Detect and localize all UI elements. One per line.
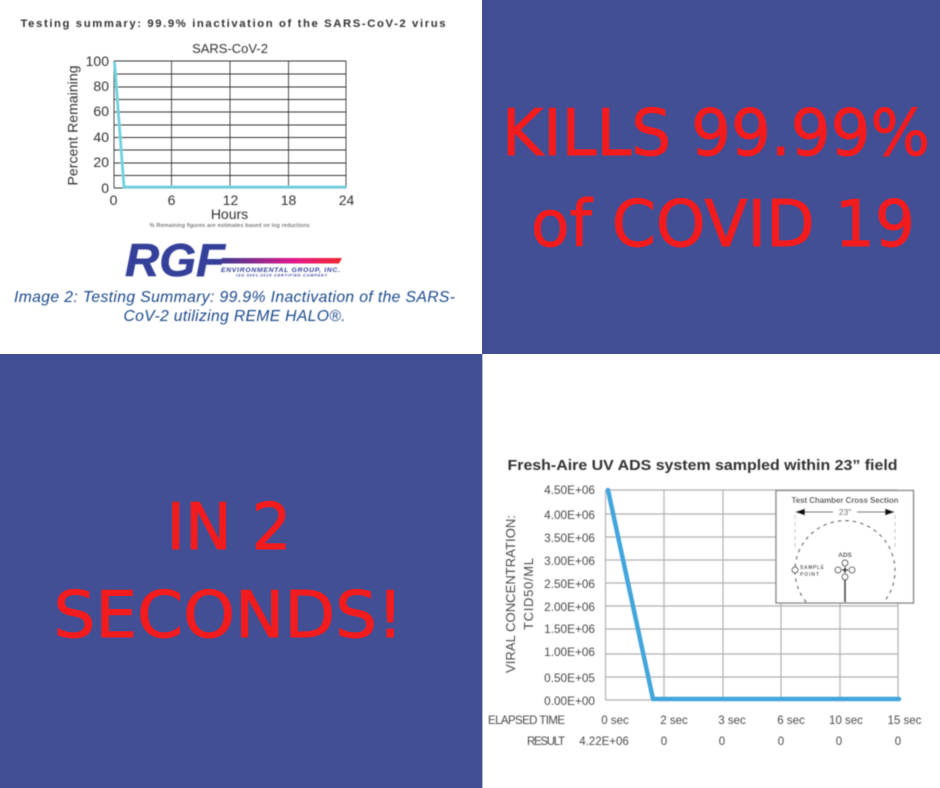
table: elapsed time and result: 0 — [836, 736, 842, 748]
logo: RGF Environmental Group — [125, 234, 342, 286]
line chart: percent remaining: 12 — [223, 192, 238, 208]
inset: test chamber cross section — [776, 490, 914, 603]
line chart: viral concentration: 0.00E+00 — [544, 694, 595, 708]
logo: RGF Environmental Group: ISO 9001:2015 CERTIFIED COMPANY — [236, 274, 327, 278]
line chart: percent remaining: 20 — [93, 154, 109, 170]
table: elapsed time and result: 10 sec — [829, 715, 863, 727]
inset: test chamber cross section: Test Chamber Cross Section — [792, 496, 899, 505]
line chart: viral concentration: VIRAL CONCENTRATION: — [503, 515, 518, 673]
line chart: viral concentration: 2.50E+06 — [544, 577, 595, 591]
line chart: percent remaining: 80 — [93, 78, 109, 94]
logo: RGF Environmental Group: RGF — [125, 234, 227, 286]
table: elapsed time and result — [488, 715, 922, 748]
line chart: percent remaining: 0 — [101, 180, 109, 196]
panel: SARS-CoV-2 testing summary — [14, 18, 455, 325]
table: elapsed time and result: 3 sec — [718, 715, 746, 727]
table: elapsed time and result: 0 — [895, 736, 901, 748]
inset: test chamber cross section: SAMPLE — [800, 565, 825, 571]
line chart: percent remaining: 18 — [281, 192, 296, 208]
table: elapsed time and result: 0 — [778, 736, 784, 748]
panel: blue bottom left — [0, 354, 482, 788]
heading: testing summary: Testing summary: 99.9% inactivation of the SARS-CoV-2 virus — [20, 18, 446, 30]
table: elapsed time and result: RESULT — [527, 736, 565, 748]
line chart: viral concentration: 3.00E+06 — [544, 554, 595, 568]
chart heading: Fresh-Aire UV ADS system sampled within 23” field — [508, 458, 898, 474]
line chart: viral concentration: 1.50E+06 — [544, 622, 595, 636]
table: elapsed time and result: 0 — [661, 736, 667, 748]
headline: kills 99.99% of COVID 19: KILLS 99.99% — [502, 97, 930, 171]
inset: test chamber cross section: 23" — [839, 507, 851, 517]
line chart: percent remaining: % Remaining figures are estimates based on log reductions — [150, 223, 310, 229]
line chart: viral concentration — [503, 483, 899, 708]
line chart: percent remaining: 24 — [339, 192, 354, 208]
line chart: percent remaining: 100 — [86, 53, 109, 69]
table: elapsed time and result: 6 sec — [777, 715, 805, 727]
inset: test chamber cross section: POINT — [800, 572, 819, 578]
line chart: viral concentration: 1.00E+06 — [544, 645, 595, 659]
line chart: viral concentration: TCID50/ML — [521, 558, 536, 630]
table: elapsed time and result: 2 sec — [660, 715, 688, 727]
line chart: percent remaining: Hours — [211, 206, 248, 222]
inset: test chamber cross section: ADS — [838, 552, 853, 559]
line chart: viral concentration: 4.00E+06 — [544, 508, 595, 522]
table: elapsed time and result: ELAPSED TIME — [488, 715, 565, 727]
headline: kills 99.99% of COVID 19: of COVID 19 — [531, 188, 915, 262]
chart title: SARS-CoV-2 — [192, 41, 268, 56]
line chart: percent remaining — [64, 53, 354, 229]
caption: CoV-2 utilizing REME HALO®. — [124, 308, 346, 325]
headline: in 2 seconds — [54, 491, 404, 653]
line chart: viral concentration: 2.00E+06 — [544, 600, 595, 614]
line chart: percent remaining: 6 — [168, 192, 176, 208]
headline: in 2 seconds: IN 2 — [166, 491, 292, 565]
headline: kills 99.99% of COVID 19 — [502, 97, 930, 262]
logo: RGF Environmental Group: ENVIRONMENTAL GROUP, INC. — [221, 267, 340, 274]
line chart: percent remaining: 40 — [93, 129, 109, 145]
line chart: percent remaining: 60 — [93, 103, 109, 119]
table: elapsed time and result: 0 — [719, 736, 725, 748]
line chart: percent remaining: 0 — [110, 192, 118, 208]
table: elapsed time and result: 4.22E+06 — [579, 736, 629, 748]
panel: blue top right — [482, 0, 940, 354]
panel: Fresh-Aire UV ADS chart — [488, 458, 922, 748]
line chart: viral concentration: 4.50E+06 — [544, 483, 595, 497]
table: elapsed time and result: 0 sec — [601, 715, 629, 727]
caption: Image 2: Testing Summary: 99.9% Inactivation of the SARS- — [14, 289, 455, 306]
headline: in 2 seconds: SECONDS! — [54, 579, 404, 653]
caption — [14, 289, 455, 325]
table: elapsed time and result: 15 sec — [888, 715, 922, 727]
line chart: viral concentration: 0.50E+05 — [544, 671, 595, 685]
line chart: percent remaining: Percent Remaining — [64, 66, 80, 186]
line chart: viral concentration: 3.50E+06 — [544, 531, 595, 545]
